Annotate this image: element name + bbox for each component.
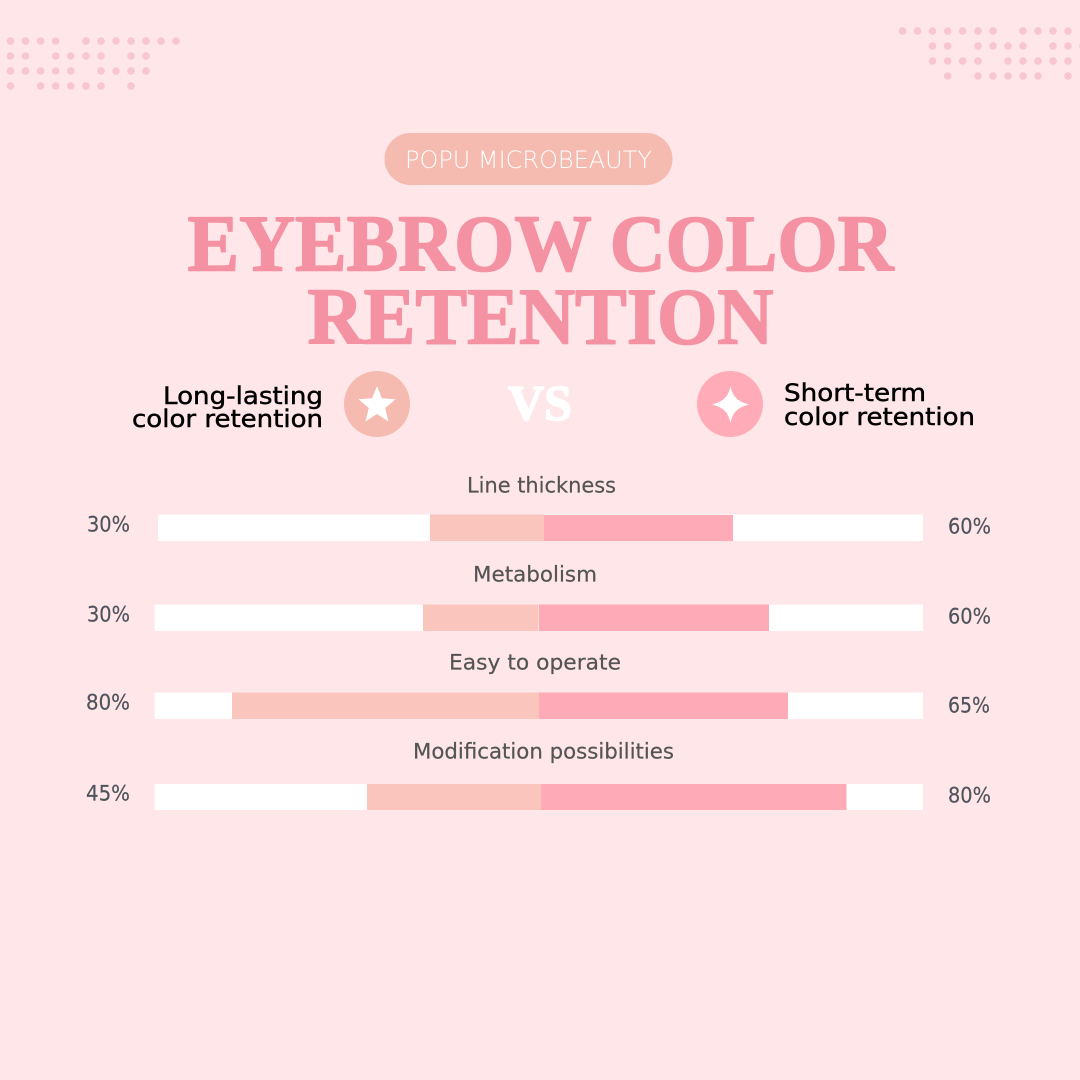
brand pill: [384, 133, 672, 185]
comparison row: modification possibilities: Modification possibilities: [413, 740, 674, 764]
comparison row: metabolism: [87, 562, 991, 631]
comparison row: line thickness: 60%: [948, 514, 991, 540]
dot pattern: top right: [899, 27, 1080, 80]
legend: short-term color retention: [697, 371, 975, 437]
brand pill: POPU MICROBEAUTY: [405, 146, 652, 174]
comparison row: metabolism: 60%: [948, 604, 991, 630]
comparison row: metabolism: Metabolism: [473, 562, 597, 588]
legend: long-lasting color retention: [132, 371, 410, 437]
legend: short-term color retention: color retention: [784, 403, 975, 431]
comparison row: line thickness: [87, 474, 991, 541]
comparison row: easy to operate: Easy to operate: [449, 650, 621, 676]
title: EYEBROW COLOR: [188, 198, 895, 288]
comparison row: line thickness: 30%: [87, 512, 130, 538]
comparison row: modification possibilities: 80%: [948, 784, 991, 808]
legend: short-term color retention: Short-term: [784, 379, 926, 407]
title: RETENTION: [308, 272, 774, 362]
legend: long-lasting color retention: color retention: [132, 405, 323, 433]
icon: four-point sparkle badge: [697, 371, 763, 437]
icon: five-point star badge: [344, 371, 410, 437]
comparison row: easy to operate: 65%: [948, 694, 990, 718]
vs label: VS: [508, 374, 572, 430]
comparison row: line thickness: Line thickness: [467, 474, 616, 498]
title: [188, 198, 895, 362]
comparison row: metabolism: 30%: [87, 602, 130, 628]
comparison row: easy to operate: [86, 650, 990, 719]
comparison row: modification possibilities: 45%: [86, 782, 130, 806]
comparison row: easy to operate: 80%: [86, 690, 130, 716]
comparison row: modification possibilities: [86, 740, 991, 810]
legend: long-lasting color retention: Long-lasting: [163, 382, 323, 410]
dot pattern: top left: [7, 37, 180, 90]
